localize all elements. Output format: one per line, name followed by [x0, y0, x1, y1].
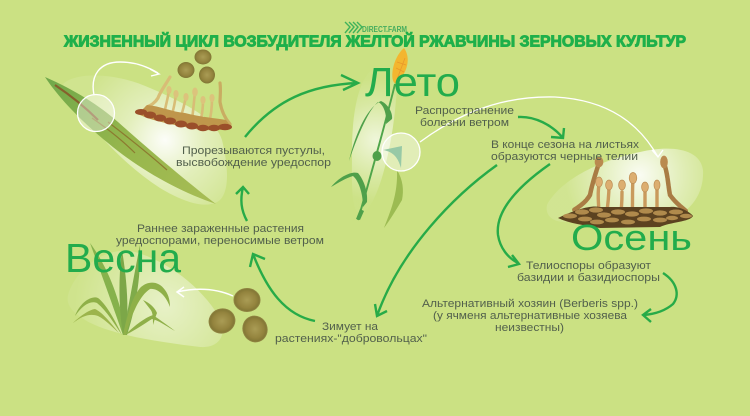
text: overwintering: Зимует на	[322, 321, 379, 333]
white zoom arrow	[93, 62, 159, 95]
arrow to telia	[518, 117, 564, 138]
panel: autumn telia	[547, 149, 703, 228]
text: pustules erupt: высвобождение уредоспор	[176, 157, 331, 169]
text: alternate host: неизвестны)	[495, 322, 564, 334]
telia base	[558, 207, 693, 228]
white arc arrow	[420, 97, 663, 157]
panel: infected leaf and pustule	[45, 50, 232, 205]
text: overwintering	[275, 321, 427, 345]
season labels	[65, 59, 692, 281]
text: wind spread: болезни ветром	[420, 117, 509, 129]
magnifier circle	[382, 133, 420, 171]
text: alternate host	[422, 298, 638, 334]
grass	[73, 243, 175, 335]
wheat ear	[392, 48, 408, 84]
arrow to teliospores	[498, 164, 550, 267]
logo: direct.farm	[345, 22, 407, 34]
panel: summer wheat plant	[331, 48, 663, 228]
text: alternate host: Альтернативный хозяин (Berberis spp.)	[422, 298, 638, 310]
urediospores	[178, 50, 215, 84]
highlight blob	[352, 67, 397, 214]
text: early infection: Раннее зараженные растения	[137, 223, 304, 235]
pustule stalks	[147, 77, 230, 124]
arrow to pustules	[236, 187, 249, 221]
arrow to alternate host	[643, 273, 677, 322]
stalk heads	[595, 156, 668, 192]
logo: direct.farm: DIRECT.FARM	[362, 25, 407, 34]
wheat stem	[358, 84, 395, 220]
text: pustules erupt	[176, 145, 331, 169]
text: basidia	[517, 260, 660, 284]
magnifier circle	[78, 94, 114, 132]
label: autumn: Осень	[571, 217, 692, 258]
panel: spring grass and spores	[68, 243, 271, 347]
highlight blob	[68, 251, 223, 347]
text: black telia: образуются черные телии	[491, 151, 638, 163]
text: early infection: уредоспорами, переносимые ветром	[116, 235, 324, 247]
long arrow to overwintering	[375, 165, 497, 316]
text: early infection	[116, 223, 324, 247]
text: pustules erupt: Прорезываются пустулы,	[182, 145, 325, 157]
white arrow	[177, 287, 233, 297]
text: black telia: В конце сезона на листьях	[491, 139, 640, 151]
text: alternate host: (у ячменя альтернативные хозяева	[433, 310, 628, 322]
text: black telia	[491, 139, 640, 163]
label: spring: Весна	[65, 235, 181, 281]
arrow to early infection	[250, 254, 315, 321]
text: overwintering: растениях-"добровольцах"	[275, 333, 427, 345]
text: wind spread: Распространение	[415, 105, 514, 117]
leaf with rust streaks	[45, 77, 216, 204]
label: summer: Лето	[365, 59, 460, 105]
highlight blob	[63, 75, 227, 205]
text: wind spread	[415, 105, 514, 129]
teliospores	[206, 288, 271, 345]
pustule base	[135, 105, 232, 131]
arrow to summer	[245, 75, 358, 137]
stem leaves	[331, 101, 403, 228]
stalk heads	[166, 86, 215, 104]
text: basidia: базидии и базидиоспоры	[517, 272, 660, 284]
title: ЖИЗНЕННЫЙ ЦИКЛ ВОЗБУДИТЕЛЯ ЖЕЛТОЙ РЖАВЧИНЫ ЗЕРНОВЫХ КУЛЬТУР	[63, 32, 686, 50]
teliospore stalks	[574, 163, 686, 218]
green cycle arrows	[236, 75, 677, 322]
text: basidia: Телиоспоры образуют	[526, 260, 651, 272]
highlight blob	[547, 149, 703, 222]
